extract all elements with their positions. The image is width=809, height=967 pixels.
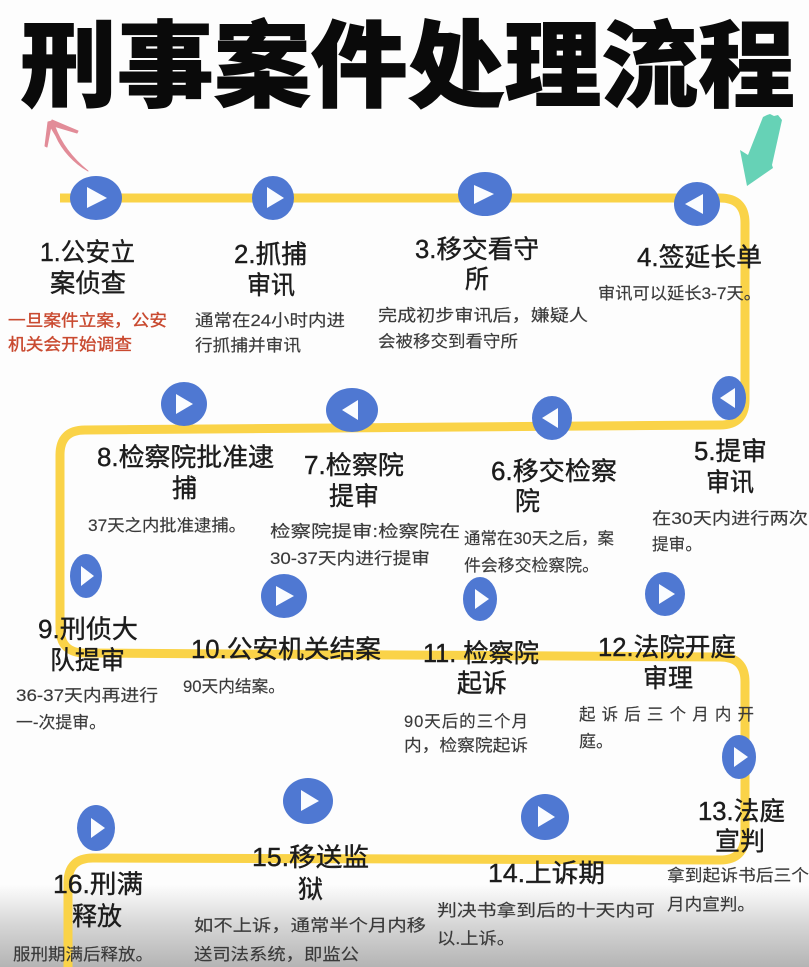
arrow: pink pointing to title: [45, 120, 88, 171]
heading 15: 狱: [298, 876, 323, 904]
heading 15: 15.移送监: [252, 844, 369, 872]
flow path: [60, 198, 745, 967]
heading 5: [694, 438, 767, 497]
bottom fade overlay: [0, 885, 809, 967]
description 14: 以.上诉。: [437, 929, 515, 948]
heading 9: [38, 616, 138, 675]
heading 5: 审讯: [706, 469, 754, 497]
heading 16: 释放: [72, 903, 122, 931]
description 4: 审讯可以延长3-7天。: [598, 284, 761, 303]
heading 9: 9.刑侦大: [38, 616, 138, 644]
description 9: 36-37天内再进行: [16, 686, 158, 705]
heading 1: 1.公安立: [40, 239, 135, 267]
heading 2: 2.抓捕: [234, 241, 307, 269]
play button 3: [458, 172, 512, 216]
heading 1: 案侦查: [50, 270, 126, 298]
heading 8: 8.检察院批准逮: [97, 444, 274, 472]
step 15: [194, 778, 426, 964]
heading 13: 13.法庭: [698, 798, 785, 826]
description 2: 行抓捕并审讯: [195, 336, 301, 355]
description 2: 通常在24小时内进: [195, 311, 345, 330]
heading 16: 16.刑满: [53, 871, 143, 899]
description 13: 拿到起诉书后三个: [667, 865, 809, 885]
description 1: 机关会开始调查: [8, 335, 132, 354]
step 7: [270, 388, 460, 568]
description 13: 月内宣判。: [667, 895, 755, 914]
heading 7: 提审: [329, 483, 379, 511]
description 5: 提审。: [652, 535, 702, 554]
heading 13: [698, 798, 785, 856]
heading 15: [252, 844, 369, 904]
step 4: [598, 182, 762, 303]
step 1: [8, 176, 167, 354]
heading 4: 4.签延长单: [637, 244, 762, 272]
play button 12: [645, 572, 685, 616]
play button 13: [722, 735, 756, 779]
play button 7: [326, 388, 378, 432]
description 9: [16, 686, 158, 732]
play button 8: [161, 382, 207, 426]
heading 14: 14.上诉期: [488, 860, 605, 888]
description 15: 如不上诉，通常半个月内移: [194, 916, 426, 935]
step 5: [652, 376, 808, 554]
heading 6: 6.移交检察: [491, 458, 617, 486]
description 5: [652, 509, 808, 554]
arrow: green hand pointing to path: [740, 114, 782, 186]
title: 刑事案件处理流程: [20, 14, 795, 119]
description 10: 90天内结案。: [183, 677, 285, 696]
heading 2: 审讯: [247, 272, 295, 300]
heading 11: [423, 640, 539, 698]
step 8: [88, 382, 274, 535]
description 12: 庭。: [579, 732, 613, 751]
description 11: 内，检察院起诉: [404, 736, 528, 755]
heading 9: 队提审: [50, 647, 125, 675]
heading 5: 5.提审: [694, 438, 767, 466]
heading 8: 捕: [172, 475, 197, 503]
play button 16: [77, 805, 115, 851]
play button 2: [252, 176, 294, 220]
description 7: [270, 522, 460, 568]
description 6: [464, 529, 614, 575]
heading 10: 10.公安机关结案: [191, 636, 381, 664]
description 3: 完成初步审讯后，嫌疑人: [378, 306, 588, 325]
description 12: [579, 705, 754, 751]
step 11: [404, 577, 539, 755]
description 5: 在30天内进行两次: [652, 509, 808, 528]
heading 12: 审理: [643, 665, 693, 693]
heading 12: 12.法院开庭: [598, 634, 736, 662]
play button 14: [521, 794, 569, 840]
description 16: 服刑期满后释放。: [13, 945, 153, 964]
play button 6: [532, 396, 572, 440]
heading 11: 11. 检察院: [423, 640, 539, 668]
heading 8: [97, 444, 274, 503]
description 14: 判决书拿到后的十天内可: [437, 900, 655, 920]
step 6: [464, 396, 617, 575]
step 2: [195, 176, 345, 355]
play button 9: [70, 554, 102, 598]
description 12: 起诉后三个月内开: [579, 705, 754, 724]
heading 6: [491, 458, 617, 516]
heading 3: [415, 236, 539, 294]
heading 3: 3.移交看守: [415, 236, 539, 264]
description 7: 30-37天内进行提审: [270, 549, 430, 568]
play button 4: [674, 182, 720, 226]
heading 16: [53, 871, 143, 931]
step 10: [183, 574, 381, 696]
description 6: 件会移交检察院。: [464, 556, 599, 575]
heading 6: 院: [515, 488, 540, 516]
step 9: [16, 554, 158, 732]
heading 2: [234, 241, 307, 300]
description 3: 会被移交到看守所: [378, 332, 518, 351]
play button 10: [261, 574, 307, 618]
step 13: [667, 735, 809, 914]
description 7: 检察院提审:检察院在: [270, 522, 460, 541]
description 1: [8, 311, 167, 354]
description 3: [378, 306, 588, 351]
heading 7: [304, 452, 404, 511]
heading 7: 7.检察院: [304, 452, 404, 480]
step 16: [13, 805, 153, 964]
description 6: 通常在30天之后，案: [464, 529, 614, 548]
play button 1: [70, 176, 122, 220]
description 15: 送司法系统，即监公: [194, 945, 359, 964]
description 1: 一旦案件立案，公安: [8, 311, 167, 330]
description 2: [195, 311, 345, 355]
play button 5: [712, 376, 746, 420]
step 14: [437, 794, 655, 948]
description 13: [667, 865, 809, 914]
heading 3: 所: [465, 266, 489, 294]
heading 11: 起诉: [457, 670, 507, 698]
description 11: [404, 712, 528, 755]
heading 13: 宣判: [715, 828, 765, 856]
play button 11: [463, 577, 497, 621]
description 11: 90天后的三个月: [404, 712, 528, 731]
description 15: [194, 916, 426, 964]
step 12: [579, 572, 754, 751]
description 8: 37天之内批准逮捕。: [88, 516, 246, 535]
heading 12: [598, 634, 736, 693]
description 9: 一-次提审。: [16, 713, 106, 732]
description 14: [437, 900, 655, 948]
step 3: [378, 172, 588, 351]
play button 15: [283, 778, 333, 824]
heading 1: [40, 239, 135, 298]
